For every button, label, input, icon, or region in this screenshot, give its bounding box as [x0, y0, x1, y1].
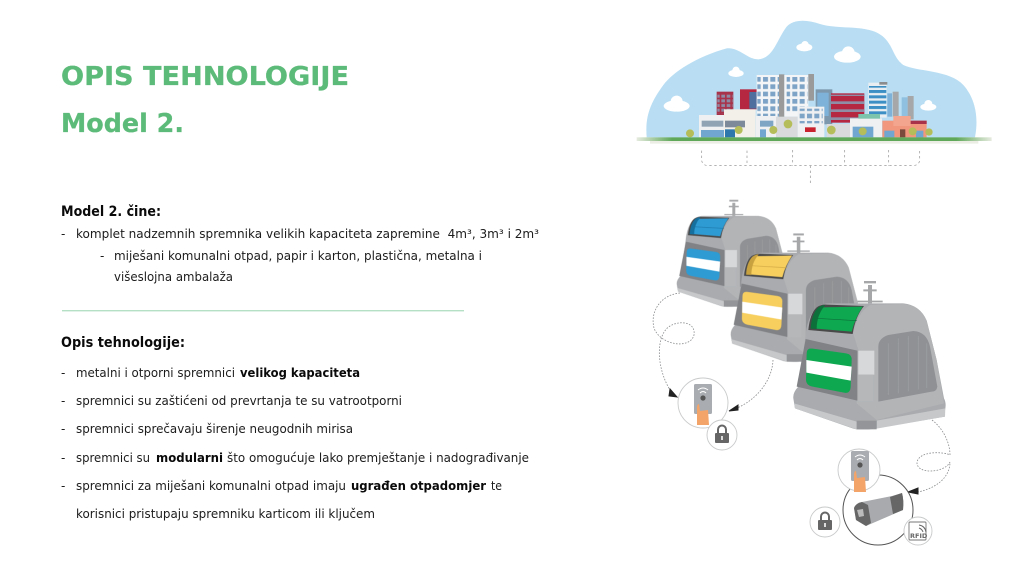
icon: level sensor	[854, 493, 903, 526]
text block: model composition: višeslojna ambalaža	[114, 270, 233, 284]
ground	[637, 137, 992, 141]
subtitle: Model 2.	[61, 109, 184, 139]
trees	[686, 120, 933, 137]
text block: technology description: spremnici za miješani komunalni otpad imaju	[76, 479, 346, 493]
green container	[793, 281, 946, 430]
text block: model composition: komplet nadzemnih spremnika velikih kapaciteta zapremine 4m³, 3m³ i 2m³	[76, 227, 539, 241]
text block: technology description: spremnici su zaštićeni od prevrtanja te su vatrootporni	[76, 394, 402, 408]
sky cloud	[646, 21, 976, 137]
clouds	[664, 41, 936, 112]
illustration: city skyline	[637, 21, 992, 185]
text block: technology description: što omogućuje lako premještanje i nadograđivanje	[227, 451, 529, 465]
icon: RFID tag: RFID	[910, 532, 928, 540]
yellow container	[731, 233, 865, 362]
title: OPIS TEHNOLOGIJE	[61, 62, 349, 92]
dashed paths	[653, 293, 950, 494]
heading: model 2 cine: Model 2. čine:	[61, 204, 161, 220]
text block: technology description: te	[491, 479, 502, 493]
text block: technology description: velikog kapaciteta	[240, 366, 360, 380]
text block: model composition: -	[100, 249, 104, 263]
text block: technology description: ugrađen otpadomjer	[351, 479, 486, 493]
text block: technology description: korisnici pristupaju spremniku karticom ili ključem	[76, 507, 375, 521]
text block: model composition: -	[61, 227, 65, 241]
text block: technology description: modularni	[156, 451, 223, 465]
text block: model composition	[61, 204, 539, 284]
text block: technology description: -	[61, 422, 65, 436]
text block: model composition: miješani komunalni otpad, papir i karton, plastična, metalna i	[114, 249, 482, 263]
text block: technology description	[61, 335, 529, 521]
text block: technology description: -	[61, 451, 65, 465]
illustration: waste containers	[677, 200, 946, 430]
dashed connectors	[702, 150, 920, 185]
text block: technology description: spremnici sprečavaju širenje neugodnih mirisa	[76, 422, 353, 436]
text block: technology description: spremnici su	[76, 451, 150, 465]
buildings	[699, 74, 927, 137]
heading: opis tehnologije: Opis tehnologije:	[61, 335, 185, 351]
text block: technology description: metalni i otporni spremnici	[76, 366, 235, 380]
icon group: blue/yellow access reader and lock	[678, 378, 737, 450]
text block: technology description: -	[61, 394, 65, 408]
blue container	[677, 200, 790, 307]
text block: technology description: -	[61, 479, 65, 493]
text block: technology description: -	[61, 366, 65, 380]
icon group: green container sensor, reader, lock and RFID	[810, 449, 932, 545]
arrowheads	[669, 389, 918, 494]
